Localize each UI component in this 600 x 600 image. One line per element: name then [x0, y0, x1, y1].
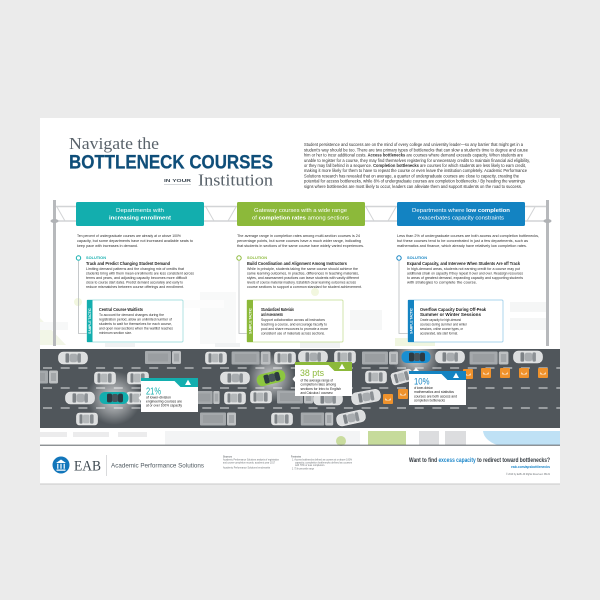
callout: 21%: at or over 100% capacity — [146, 404, 182, 408]
sample tactic box: minimum section size. — [99, 331, 132, 335]
callout: 21%: 21% — [146, 386, 161, 398]
sample tactic box — [408, 300, 503, 342]
solution text: SOLUTION — [407, 256, 427, 260]
solution text: same learning outcomes, in practice, differences in teaching materials, — [247, 271, 359, 276]
solution timeline — [239, 261, 247, 334]
panel: completion rates column — [237, 233, 364, 342]
intro paragraph: potential for access bottlenecks, while 8% of undergraduate courses are completion bottlenecks.¹ By heeding the warnings — [304, 179, 525, 184]
completion intro text: that students in sections of the same course have widely varied experiences. — [237, 243, 364, 248]
road with traffic — [40, 349, 560, 428]
footer sources: Academic Performance Solutions benchmarks — [223, 466, 271, 469]
intro paragraph: him or her to incur additional costs. Access bottlenecks are courses where demand exceeds capacity. When students are — [304, 153, 524, 158]
sample tactic box: registration period, allow an unlimited number of — [99, 318, 173, 322]
solution text: Expand Capacity, and Intervene When Students Are off Track — [407, 261, 520, 266]
solution text: In high-demand areas, students not earning credit for a course may put — [407, 266, 521, 271]
blue highlighted car — [402, 351, 430, 363]
footer sources: Academic Performance Solutions analysis of registration — [223, 458, 280, 462]
callout: 10%: of lower-division — [414, 386, 433, 390]
title: IN YOUR — [164, 178, 192, 184]
enrollment intro text — [77, 233, 194, 248]
sign: departments with increasing enrollment: Departments with — [116, 208, 164, 214]
completion intro text: The average range in completion rates among multi-section courses is 24 — [237, 233, 361, 238]
poster background — [40, 118, 560, 484]
intro paragraph: making it more likely for them to have to repeat the course or even leave the institution completely. Academic Performance — [304, 168, 528, 173]
callout: 21%: of lower-division — [146, 396, 171, 400]
sample tactic box: consistent use of materials across sections. — [261, 332, 325, 336]
solution text — [407, 256, 523, 285]
footer footnotes: 1. Access bottlenecks defined as courses at or above 100% — [292, 458, 353, 462]
call to action: © 2019 by EAB. All Rights Reserved. 36131 — [506, 473, 551, 476]
solution text: to areas of greatest demand, expanding capacity and supporting students — [407, 275, 523, 280]
panel: enrollment column — [76, 233, 194, 342]
enrollment intro text: keep pace with increases in demand. — [77, 243, 138, 248]
sample tactic box: To account for demand changes during the — [99, 313, 164, 317]
solution text: styles, and assessment practices can leave students with vastly different — [247, 275, 360, 280]
low completion intro text: but these courses tend to be concentrated in just a few departments, such as — [397, 238, 528, 243]
sample tactic box: and Assessments — [261, 312, 283, 317]
callout: 38 pts: completion rates among — [300, 383, 336, 387]
callout: 38 pts: 38 pts — [300, 368, 324, 379]
call to action: eab.com/apsbottlenecks — [511, 464, 550, 469]
low completion intro text: mathematics and finance, which already have relatively low completion rates. — [397, 243, 527, 248]
sample tactic box: Create capacity for high-demand — [420, 318, 461, 322]
solution marker — [237, 256, 241, 260]
call to action — [409, 457, 551, 476]
intro paragraph: Student persistence and success are on the mind of every college and university leader—so any barrier that might get in a — [304, 142, 524, 147]
callout: 10%: 10% — [414, 376, 430, 388]
sign: low completion departments — [397, 202, 525, 226]
teal highlighted car — [100, 392, 128, 404]
faded map backdrop — [40, 288, 548, 348]
intro paragraph: student's way should be too. There are two primary types of bottlenecks that can slow a student's time to degree and cause — [304, 147, 529, 152]
callout: 10%: courses are both access and — [414, 394, 457, 398]
low completion intro text: Less than 2% of undergraduate courses are both access and completion bottlenecks, — [397, 233, 539, 238]
callout: 38 pts: and Calculus I courses² — [300, 391, 334, 395]
sample tactic box: Summer or Winter Sessions — [420, 312, 482, 317]
sample tactic box: Overflow Capacity During Off-Peak — [420, 307, 487, 312]
solution text: course sections to support a common standard for student achievement. — [247, 284, 362, 289]
callout: 21% — [138, 378, 198, 412]
solution text: Track and Predict Changing Student Demand — [86, 261, 170, 266]
solution text: While in principle, students taking the same course should achieve the — [247, 266, 359, 271]
solution timeline — [399, 261, 408, 334]
sample tactic box — [87, 300, 183, 342]
title: BOTTLENECK COURSES — [69, 153, 273, 174]
callout: 10% — [409, 368, 466, 405]
solution text: students bring with them mean enrollments are less consistent across — [86, 271, 194, 276]
intro paragraph — [304, 142, 530, 189]
sign: departments with increasing enrollment — [76, 202, 204, 226]
sign: gateway courses: of completion rates among sections — [252, 216, 349, 222]
completion intro text — [237, 233, 364, 248]
sample tactic box: and open new sections when the waitlist reaches — [99, 327, 173, 331]
footer sources: Sources — [223, 456, 233, 458]
sample tactic box: students to wait for themselves for each course, — [99, 322, 172, 326]
sample tactic box: Central Course Waitlists — [99, 307, 144, 312]
solution text: Limiting demand patterns and the changing mix of credits that — [86, 266, 185, 271]
solution text: with strategies to complete the course. — [407, 280, 477, 285]
enrollment intro text: capacity, but some departments have not increased available seats to — [77, 238, 194, 243]
solution text: SOLUTION — [247, 256, 267, 260]
sample tactic box: SAMPLE TACTIC — [248, 307, 252, 334]
sign: departments with increasing enrollment: increasing enrollment — [109, 216, 171, 222]
enrollment intro text: Ten percent of undergraduate courses are already at or above 100% — [77, 233, 181, 238]
footer footnotes: with 70% or less completion. — [295, 464, 325, 467]
sample tactic box — [247, 300, 343, 342]
sample tactic box: courses during summer and winter — [420, 322, 468, 326]
sample tactic box: Standardized Materials — [261, 307, 294, 312]
low completion intro text — [397, 233, 539, 248]
completion intro text: percentage points, but some courses have a much wider range, indicating — [237, 238, 361, 243]
solution marker — [397, 256, 401, 260]
solution text: levels of course material mastery. Establish clear learning outcomes across — [247, 280, 356, 285]
panel: low completion column — [397, 233, 539, 342]
sign: gateway courses: Gateway courses with a wide range — [254, 208, 347, 214]
solution text — [86, 256, 194, 289]
icon: institution seal — [52, 456, 70, 474]
footer logo: EAB — [52, 455, 205, 476]
footer sources: and course-completion records, academic year 2017 — [223, 462, 276, 464]
solution text: SOLUTION — [86, 256, 106, 260]
callout: 38 pts: of the average range of — [300, 378, 333, 382]
callout: 38 pts — [292, 362, 352, 396]
title: Institution — [198, 170, 273, 190]
intro paragraph: signs where bottlenecks are most likely to occur, leaders can alleviate them and support students on the road to success. — [304, 184, 522, 189]
sign: low completion departments: exacerbates capacity constraints — [418, 216, 504, 222]
sample tactic box: pool and share resources to promote a more — [261, 327, 328, 331]
highway gantry — [50, 200, 552, 346]
green highlighted car — [255, 369, 287, 387]
sample tactic box: accelerated, late start format. — [420, 332, 458, 336]
callout: 10%: mathematics and statistics — [414, 390, 454, 394]
solution text: close to course start dates. Predict demand accurately and early to — [86, 280, 184, 285]
solution text: terms and years, and adjusting capacity becomes more difficult — [86, 275, 188, 280]
sample tactic box: sessions, online course types, or — [420, 327, 464, 331]
footer logo: EAB: Academic Performance Solutions — [111, 462, 205, 470]
footer footnotes: Footnotes — [291, 456, 302, 458]
intro paragraph: or they may fall behind in a sequence. Completion bottlenecks are courses for which students are less likely to earn credit, — [304, 163, 526, 168]
solution text: additional strain on capacity if they repeat it over and over. Reassign resources — [407, 271, 523, 276]
title — [69, 134, 273, 190]
sign: low completion departments: Departments where low completion — [412, 208, 510, 214]
poster bottom edge — [40, 484, 560, 485]
solution text: Build Coordination and Alignment Among Instructors — [247, 261, 347, 266]
callout: 21%: engineering courses are — [146, 400, 182, 404]
sample tactic box: Support collaboration across all instructors — [261, 318, 325, 322]
solution text: reduce mismatches between course offerings and enrollment. — [86, 284, 184, 289]
sample tactic box: teaching a course, and encourage faculty to — [261, 322, 327, 326]
footer footnotes: 2. 75 th percentile range — [292, 468, 315, 470]
map strip below road — [40, 431, 560, 446]
sample tactic box: SAMPLE TACTIC — [88, 307, 92, 334]
footer logo: EAB: EAB — [74, 458, 101, 474]
solution marker — [76, 256, 81, 260]
sign: gateway courses — [237, 202, 365, 226]
callout: 38 pts: sections for Intro to English — [300, 387, 341, 391]
intro paragraph: unable to register for a course, they may find themselves registering for unnecessary credits to maintain financial aid eligibility, — [304, 158, 530, 163]
footer footnotes — [291, 456, 353, 470]
call to action: Want to find excess capacity to redirect toward bottlenecks? — [409, 457, 550, 464]
solution timeline — [78, 261, 87, 334]
footer sources — [223, 456, 280, 469]
solution text — [247, 256, 362, 289]
title: Navigate the — [69, 134, 159, 153]
intro paragraph: Solutions research has revealed that on average, a quarter of undergraduate courses are close to capacity, creating the — [304, 173, 520, 178]
footer footnotes: capacity; completion bottlenecks defined as courses — [295, 462, 353, 464]
sample tactic box: SAMPLE TACTIC — [409, 307, 413, 334]
callout: 10%: completion bottlenecks — [414, 399, 445, 403]
